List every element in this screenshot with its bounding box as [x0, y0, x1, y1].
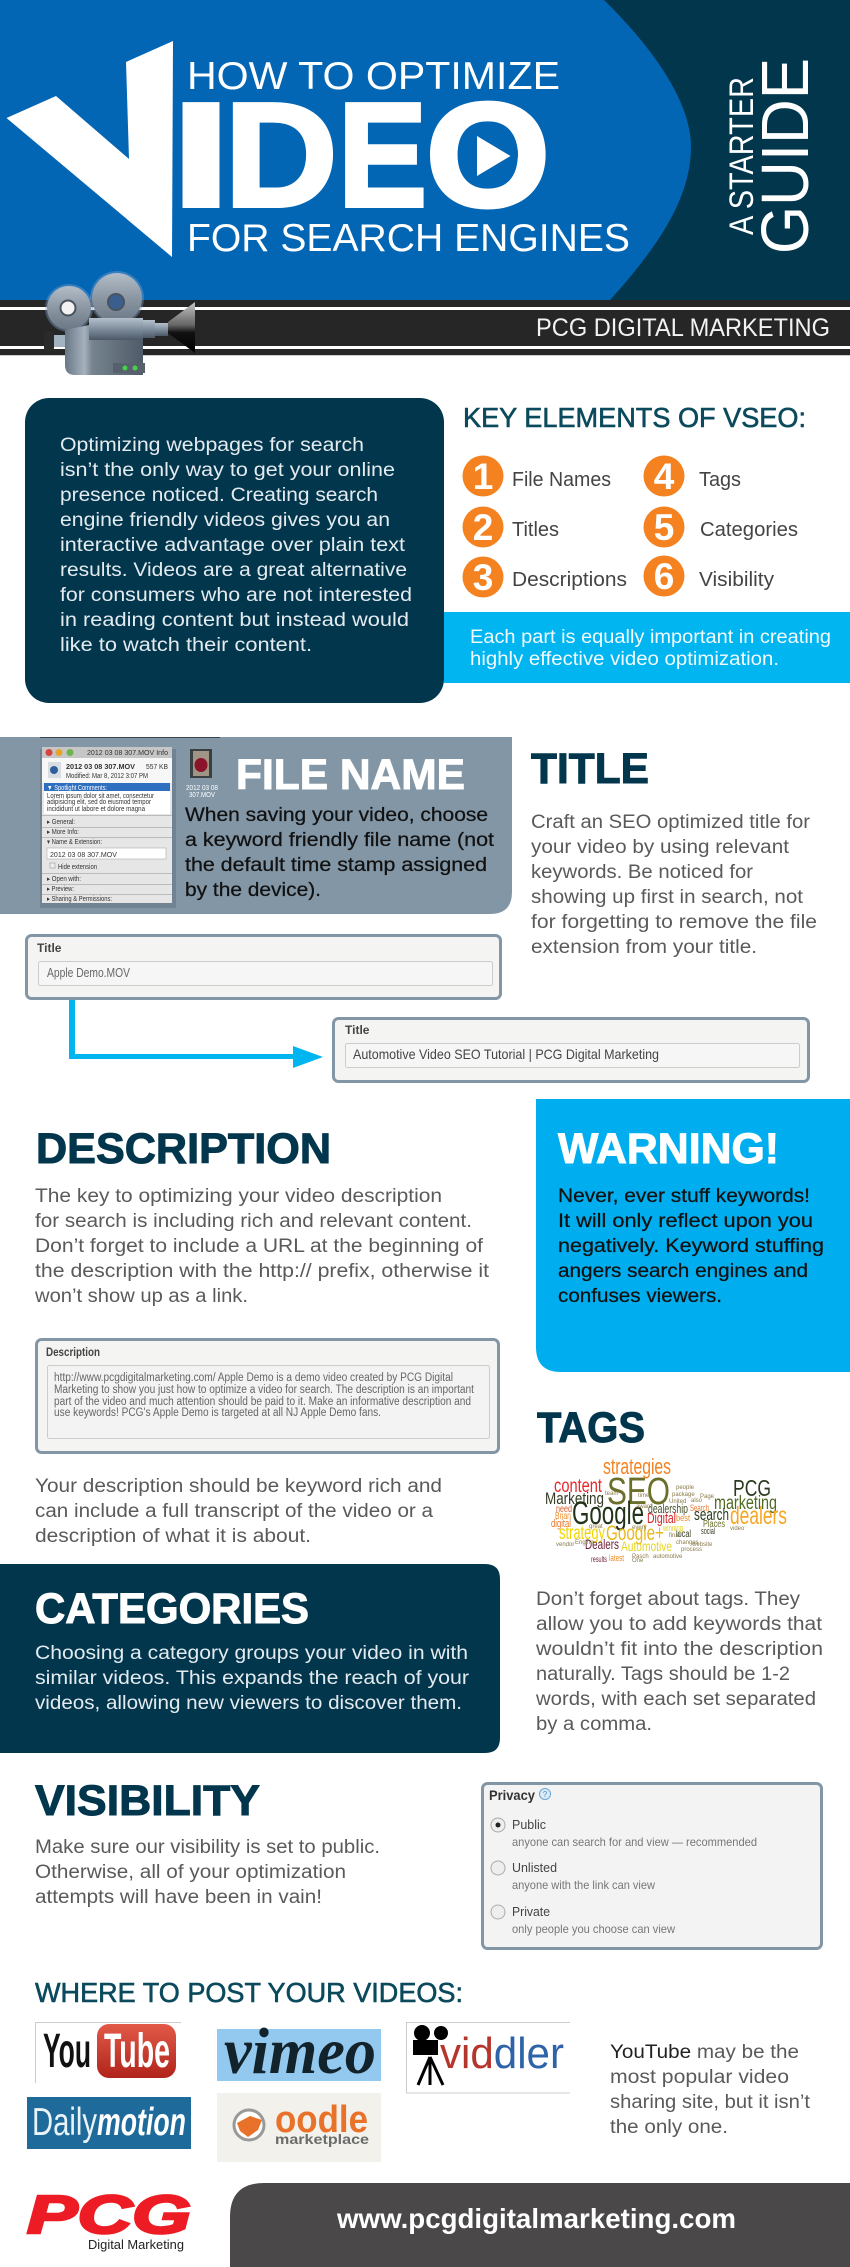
heading: tags: TAGS [537, 1404, 645, 1452]
description text: Don’t forget to include a URL at the beginning of [35, 1236, 484, 1257]
screenshot: mac file info window: ▸ Sharing & Permissions: [47, 896, 112, 903]
header banner [0, 0, 850, 300]
intro text: engine friendly videos gives you an [60, 510, 390, 531]
word cloud: tags: Search [690, 1503, 709, 1513]
callout: each part is equally important: Each part is equally important in creating [470, 627, 831, 648]
form: privacy settings: only people you choose can view [512, 1922, 675, 1936]
word cloud: tags: also [691, 1498, 703, 1504]
numbered list: key elements: Titles [512, 519, 559, 541]
title text: extension from your title. [531, 937, 757, 958]
intro text: isn’t the only way to get your online [60, 460, 395, 481]
form: description: use keywords! PCG's Apple Demo is targeted at all NJ Apple Demo fans. [54, 1407, 381, 1419]
logo: oodle marketplace [217, 2093, 381, 2162]
tags text: wouldn’t fit into the description [535, 1639, 823, 1660]
word cloud: tags: winning [662, 1523, 683, 1533]
callout: each part is equally important: highly effective video optimization. [470, 649, 779, 670]
categories text: Choosing a category groups your video in with [35, 1643, 468, 1664]
form: privacy settings [482, 1784, 822, 1948]
tags text: words, with each set separated [535, 1689, 816, 1710]
word cloud: tags: results [591, 1555, 607, 1564]
word cloud: tags: One [632, 1558, 644, 1564]
word cloud: tags [545, 1454, 787, 1564]
intro text: for consumers who are not interested [60, 585, 412, 606]
title: how to optimize video for search engines: FOR SEARCH ENGINES [187, 217, 630, 260]
screenshot: mac file info window: 557 KB [146, 764, 168, 771]
description text: The key to optimizing your video description [35, 1186, 442, 1207]
file name text: by the device). [185, 880, 321, 901]
logo: pcg digital marketing [27, 2185, 191, 2252]
logo: pcg digital marketing: PCG [27, 2185, 191, 2245]
screenshot: mac file info window: incididunt ut labore et dolore magna [47, 806, 145, 813]
form: privacy settings: anyone with the link can view [512, 1878, 655, 1892]
footer url: www.pcgdigitalmarketing.com [336, 2203, 736, 2234]
form: privacy settings: Unlisted [512, 1860, 557, 1875]
footer bar [230, 2183, 850, 2267]
word cloud: tags: search [694, 1505, 729, 1524]
word cloud: tags: great [589, 1524, 603, 1530]
logo: vimeo: vimeo [224, 2015, 376, 2088]
form: description: Description [46, 1345, 100, 1359]
description text: the description with the http:// prefix, otherwise it [35, 1261, 490, 1282]
description text: for search is including rich and relevant content. [35, 1211, 472, 1232]
word cloud: tags: local [676, 1529, 691, 1540]
form: description: Marketing to show you just how to optimize a video for search. The description is an important [54, 1384, 475, 1396]
logo: youtube: Tube [104, 2025, 170, 2078]
numbered list: key elements: 5 [654, 507, 674, 548]
intro text: presence noticed. Creating search [60, 485, 378, 506]
arrow: before to after title [69, 1000, 323, 1068]
heading: file name: FILE NAME [236, 751, 465, 799]
logo: viddler: viddler [440, 2029, 564, 2078]
screenshot: mac file info window: ▸ More Info: [47, 829, 79, 836]
form: privacy settings: ? [543, 1790, 548, 1799]
title text: Craft an SEO optimized title for [531, 812, 811, 833]
form: after title: Title [345, 1023, 370, 1037]
warning text: angers search engines and [558, 1261, 808, 1282]
word cloud: tags: final [669, 1533, 680, 1539]
numbered list: key elements: 4 [654, 456, 675, 497]
title: how to optimize video for search engines: HOW TO OPTIMIZE [187, 55, 560, 98]
form: before title [26, 936, 500, 998]
warning text: Never, ever stuff keywords! [558, 1186, 810, 1207]
tags text: by a comma. [536, 1714, 652, 1735]
icon: movie camera [44, 271, 195, 375]
title: how to optimize video for search engines: O [426, 73, 550, 238]
icon: video thumbnail: 2012 03 08 [186, 785, 218, 792]
word cloud: tags: Engine [575, 1540, 594, 1546]
screenshot: mac file info window: Modified: Mar 8, 2012 3:07 PM [66, 773, 148, 780]
description note: description of what it is about. [35, 1526, 311, 1547]
word cloud: tags: strategy [559, 1523, 605, 1544]
file name text: a keyword friendly file name (not [185, 830, 495, 851]
numbered list: key elements: Visibility [699, 569, 774, 591]
a starter guide: A STARTER [723, 77, 761, 235]
file name text: When saving your video, choose [185, 805, 488, 826]
description text: won’t show up as a link. [34, 1286, 248, 1307]
title text: showing up first in search, not [531, 887, 804, 908]
numbered list: key elements: 6 [654, 556, 674, 597]
title: how to optimize video for search engines: D [224, 73, 338, 238]
form: before title: Apple Demo.MOV [47, 965, 130, 980]
word cloud: tags: best [676, 1513, 690, 1523]
word cloud: tags: website [691, 1542, 713, 1548]
word cloud: tags: social [701, 1526, 715, 1536]
title: how to optimize video for search engines: I [171, 73, 231, 238]
title text: your video by using relevant [531, 837, 790, 858]
panel: intro [25, 398, 444, 703]
heading: description: DESCRIPTION [36, 1125, 331, 1173]
title text: for forgetting to remove the file [531, 912, 817, 933]
screenshot: mac file info window [40, 747, 176, 908]
description note: Your description should be keyword rich and [35, 1476, 442, 1497]
word cloud: tags: marketing [714, 1493, 777, 1514]
callout: each part is equally important [444, 612, 850, 683]
word cloud: tags: automotive [653, 1554, 683, 1560]
screenshot: mac file info window: 2012 03 08 307.MOV [66, 764, 135, 771]
tags text [535, 1589, 823, 1735]
screenshot: mac file info window: adipisicing elit, sed do eiusmod tempor [47, 799, 152, 806]
heading: visibility: VISIBILITY [35, 1777, 260, 1825]
screenshot: mac file info window: ▼ Spotlight Comments: [47, 785, 107, 792]
form: description: http://www.pcgdigitalmarketing.com/ Apple Demo is a demo video created by PCG Digital [54, 1372, 453, 1384]
intro text: like to watch their content. [60, 635, 312, 656]
word cloud: tags: video [730, 1526, 745, 1532]
word cloud: tags: Brian [555, 1511, 571, 1522]
file name text: the default time stamp assigned [185, 855, 487, 876]
word cloud: tags: latest [609, 1553, 624, 1563]
title text: keywords. Be noticed for [531, 862, 754, 883]
word cloud: tags: award [636, 1504, 652, 1510]
youtube note: YouTube may be the [610, 2042, 799, 2063]
numbered list: key elements: Categories [700, 519, 798, 541]
youtube note [610, 2042, 811, 2138]
tags text: allow you to add keywords that [536, 1614, 823, 1635]
black striped band [0, 300, 850, 356]
word cloud: tags: dealership [648, 1501, 688, 1516]
visibility text: Otherwise, all of your optimization [35, 1862, 346, 1883]
word cloud: tags: PCG [733, 1475, 771, 1501]
intro text [60, 435, 412, 656]
intro text: results. Videos are a great alternative [60, 560, 407, 581]
intro text: Optimizing webpages for search [60, 435, 364, 456]
form: privacy settings: anyone can search for and view — recommended [512, 1835, 757, 1849]
numbered list: key elements: 1 [473, 456, 493, 497]
numbered list: key elements: 2 [473, 507, 493, 548]
word cloud: tags: Google+ [606, 1522, 664, 1545]
word cloud: tags: time [638, 1493, 650, 1499]
screenshot: mac file info window: ▸ Preview: [47, 886, 74, 893]
word cloud: tags: Pasch [632, 1554, 649, 1560]
warning text: confuses viewers. [558, 1286, 722, 1307]
word cloud: tags: Automotive [621, 1538, 672, 1554]
word cloud: tags: dealers [730, 1502, 787, 1530]
screenshot: mac file info window: 2012 03 08 307.MOV Info [87, 750, 168, 757]
word cloud: tags: Marketing [545, 1489, 604, 1508]
word cloud: tags: digital [551, 1518, 571, 1530]
screenshot: mac file info window: Hide extension [58, 864, 97, 871]
panel: categories [0, 1564, 500, 1753]
heading: warning: WARNING! [558, 1125, 779, 1173]
word cloud: tags: SEO [607, 1471, 670, 1513]
word cloud: tags: every [632, 1525, 647, 1531]
categories text: similar videos. This expands the reach of your [35, 1668, 470, 1689]
logo: youtube [36, 2022, 181, 2083]
word cloud: tags: Places [703, 1519, 725, 1530]
logo: pcg digital marketing: Digital Marketing [88, 2237, 184, 2252]
numbered list: key elements: Tags [699, 469, 741, 491]
word cloud: tags: need [556, 1504, 572, 1515]
description text [34, 1186, 490, 1307]
icon: video thumbnail: 307.MOV [189, 792, 215, 799]
word cloud: tags: vendor [556, 1542, 574, 1548]
logo: dailymotion: motion [97, 2101, 186, 2144]
warning text: It will only reflect upon you [558, 1211, 813, 1232]
categories text: videos, allowing new viewers to discover them. [35, 1693, 462, 1714]
heading: title: TITLE [531, 745, 649, 793]
form: privacy settings: Private [512, 1904, 550, 1919]
form: privacy settings: Public [512, 1817, 546, 1832]
tags text: Don’t forget about tags. They [536, 1589, 801, 1610]
heading: where to post your videos: WHERE TO POST YOUR VIDEOS: [35, 1977, 463, 2008]
logo: dailymotion: Daily [32, 2101, 97, 2144]
word cloud: tags: changes [676, 1540, 699, 1546]
word cloud: tags: United [669, 1499, 686, 1505]
numbered list: key elements [462, 456, 798, 598]
word cloud: tags: content [554, 1476, 603, 1497]
word cloud: tags: team [605, 1491, 618, 1497]
screenshot: mac file info window: ▾ Name & Extension: [47, 839, 102, 846]
warning text [558, 1186, 824, 1307]
logo: youtube: You [43, 2025, 91, 2078]
word cloud: tags: process [681, 1547, 702, 1553]
a starter guide: GUIDE [748, 58, 823, 254]
word cloud: tags: Google [572, 1495, 644, 1531]
tags text: naturally. Tags should be 1-2 [536, 1664, 790, 1685]
heading: categories: CATEGORIES [35, 1585, 309, 1633]
form: description: part of the video and much attention should be paid to it. Make an informative description and [54, 1396, 471, 1408]
youtube note: sharing site, but it isn’t [610, 2092, 811, 2113]
logo: dailymotion [27, 2097, 191, 2149]
visibility text [35, 1837, 380, 1908]
word cloud: tags: Page [700, 1494, 715, 1500]
visibility text: Make sure our visibility is set to public. [35, 1837, 380, 1858]
warning text: negatively. Keyword stuffing [558, 1236, 824, 1257]
logo: oodle marketplace: marketplace [275, 2131, 369, 2147]
icon: video thumbnail [186, 749, 218, 799]
logo: oodle marketplace: oodle [275, 2099, 368, 2141]
youtube note: the only one. [610, 2117, 728, 2138]
intro text: in reading content but instead would [60, 610, 409, 631]
word cloud: tags: strategies [603, 1454, 671, 1479]
form: before title: Title [37, 941, 62, 955]
screenshot: mac file info window: 2012 03 08 307.MOV [50, 852, 117, 859]
numbered list: key elements: File Names [512, 469, 611, 491]
title text [531, 812, 817, 958]
form: description [36, 1340, 498, 1452]
description note: can include a full transcript of the video or a [35, 1501, 433, 1522]
youtube note: most popular video [610, 2067, 789, 2088]
title: how to optimize video for search engines: E [338, 73, 427, 238]
numbered list: key elements: 3 [473, 557, 493, 598]
intro text: interactive advantage over plain text [60, 535, 406, 556]
form: after title [334, 1018, 808, 1082]
file name text [185, 805, 495, 901]
heading: key elements of vseo: KEY ELEMENTS OF VSEO: [463, 402, 806, 433]
title: how to optimize video for search engines [6, 41, 630, 260]
form: after title: Automotive Video SEO Tutorial | PCG Digital Marketing [353, 1046, 659, 1062]
word cloud: tags: Digital [647, 1510, 676, 1527]
panel: warning [536, 1099, 850, 1372]
screenshot: mac file info window: ▸ General: [47, 819, 75, 826]
panel: file name [0, 737, 512, 914]
word cloud: tags: package [672, 1492, 695, 1498]
band text: pcg digital marketing: PCG DIGITAL MARKETING [536, 314, 830, 342]
logo: viddler [406, 2022, 570, 2093]
form: privacy settings: Privacy [489, 1787, 535, 1803]
screenshot: mac file info window: Lorem ipsum dolor sit amet, consectetur [47, 793, 155, 800]
visibility text: attempts will have been in vain! [35, 1887, 322, 1908]
numbered list: key elements: Descriptions [512, 569, 627, 591]
description note [35, 1476, 442, 1547]
screenshot: mac file info window: ▸ Open with: [47, 876, 81, 883]
word cloud: tags: people [676, 1485, 695, 1491]
categories text [35, 1643, 470, 1714]
word cloud: tags: Dealers [585, 1536, 619, 1552]
